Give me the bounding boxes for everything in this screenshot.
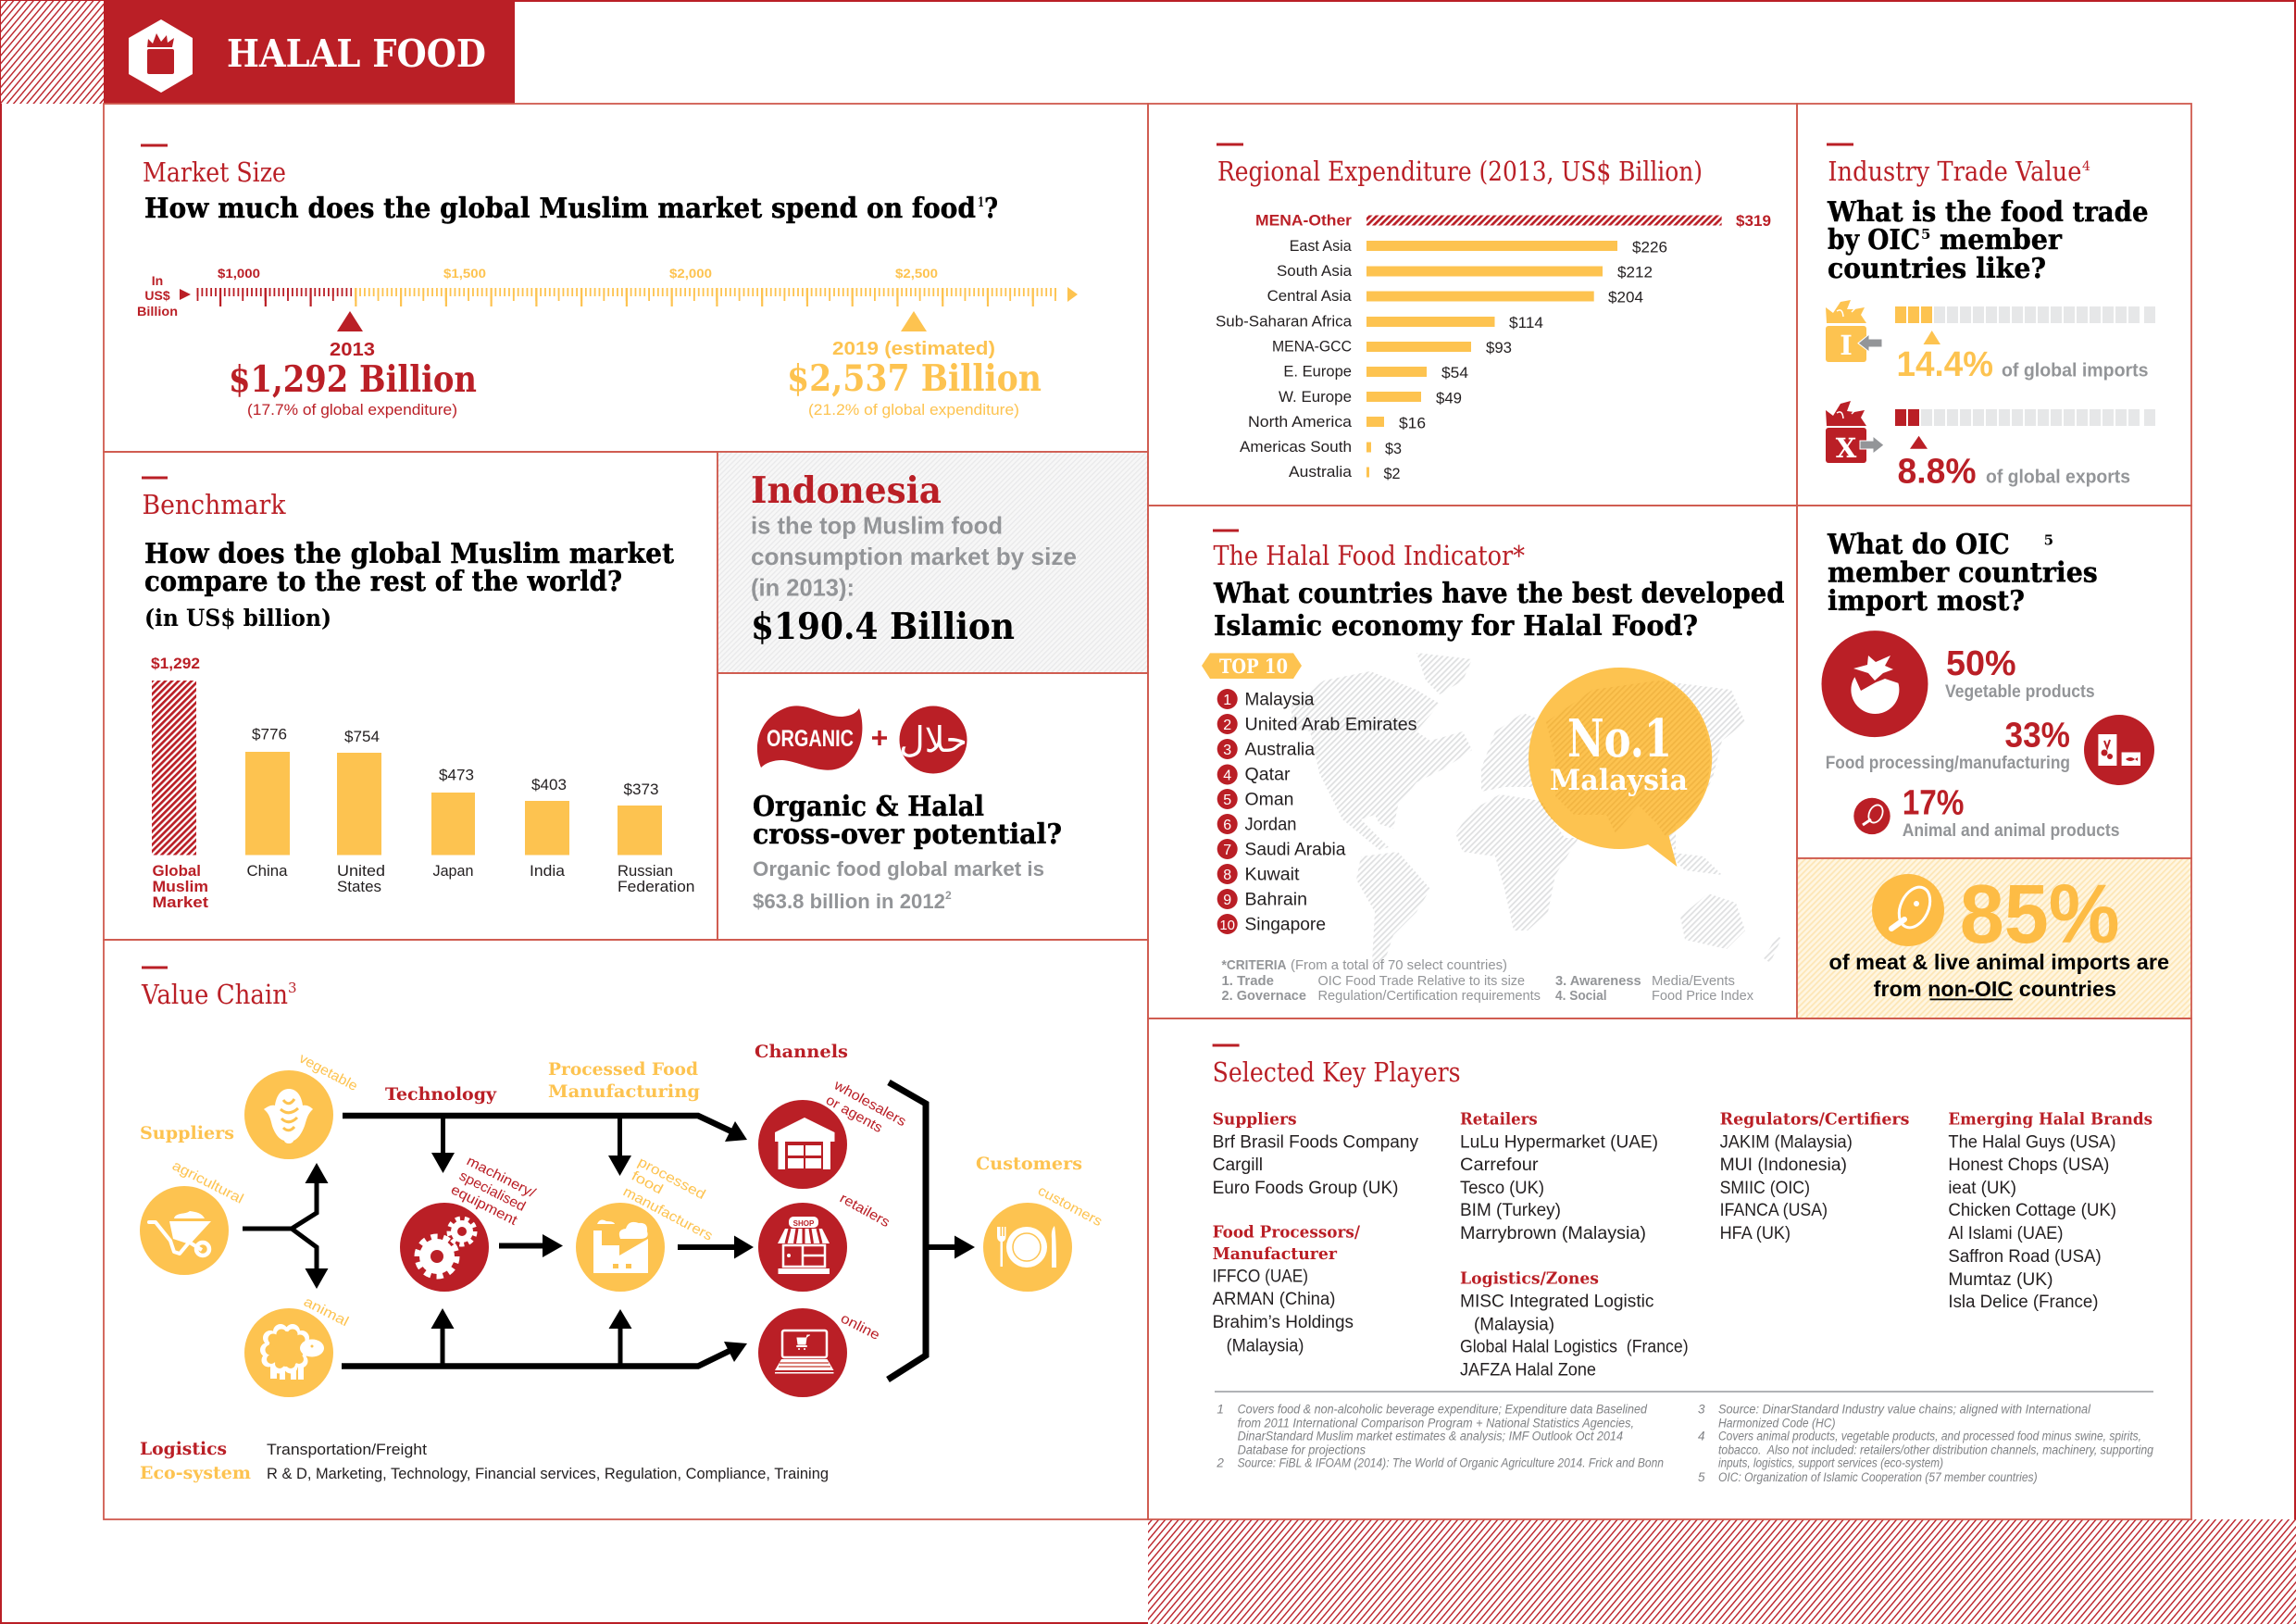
bar chart: regional expenditure: E. Europe <box>1283 363 1352 380</box>
stat: 50% vegetable products: Vegetable products <box>1945 682 2095 702</box>
icon: factory <box>576 1203 665 1292</box>
stat: 50% vegetable products <box>1945 644 2095 702</box>
list: top 10 countries: 4 <box>1223 768 1231 783</box>
footnotes: left column: Database for projections <box>1238 1443 1366 1457</box>
stat: 2019 estimated: 2019 (estimated) <box>832 339 995 359</box>
icon: organic leaf <box>757 706 862 770</box>
arrow: factory to shop <box>678 1235 754 1259</box>
bar chart: regional expenditure: $319 <box>1736 212 1771 230</box>
labels: rotated chain captions: equipment <box>448 1181 520 1229</box>
list: retailers and logistics: Global Halal Logistics (France) <box>1460 1338 1689 1357</box>
callout text: (in 2013): <box>751 574 855 602</box>
footnotes: left column: DinarStandard Muslim market estimates & analysis; IMF Outlook Oct 2014 <box>1238 1430 1623 1443</box>
footnotes: left column: Source: FiBL & IFOAM (2014): The World of Organic Agriculture 2014. Frick and Bonn <box>1238 1456 1664 1470</box>
bar chart: regional expenditure: MENA-Other <box>1255 211 1352 230</box>
list: emerging halal brands <box>1948 1109 2152 1312</box>
bar chart: regional expenditure: $226 <box>1632 239 1667 256</box>
list: suppliers and food processors <box>1213 1109 1418 1356</box>
text: organic market: $63.8 billion in 2012 <box>753 890 945 913</box>
stat: 8.8% of global exports <box>1898 453 2130 492</box>
icon: plus <box>872 731 887 745</box>
footnotes: right column: inputs, logistics, support services (eco-system) <box>1718 1456 1943 1470</box>
stat: 50% vegetable products: 50% <box>1946 644 2016 683</box>
icon: sheep animal <box>244 1308 333 1397</box>
list: suppliers and food processors: Suppliers <box>1213 1109 1297 1129</box>
footnotes: right column: Harmonized Code (HC) <box>1718 1417 1835 1430</box>
list: top 10 countries: Oman <box>1244 791 1294 809</box>
bar chart: market comparison: China <box>246 862 288 880</box>
stat: 2019 estimated: (21.2% of global expenditure) <box>808 401 1019 418</box>
bar chart: regional expenditure: Australia <box>1289 463 1353 481</box>
icon: shop retailers <box>758 1203 847 1292</box>
bar chart: market comparison: Global <box>152 862 201 880</box>
question: organic and halal: Organic & Halal <box>753 791 984 823</box>
callout text: is the top Muslim food <box>751 511 1003 539</box>
icon: plate customers <box>983 1203 1072 1292</box>
stage label: technology: Technology <box>385 1084 497 1105</box>
labels: rotated chain captions: machinery/ <box>464 1153 539 1202</box>
stat: 17% animal products: 17% <box>1903 784 1965 823</box>
heading: selected key players: Selected Key Players <box>1213 1056 1461 1088</box>
icon: small meat <box>1853 798 1890 834</box>
heading: value chain: Value Chain <box>141 979 288 1010</box>
labels: rotated chain captions: specialised <box>456 1168 528 1215</box>
list: top 10 countries: 8 <box>1223 868 1231 883</box>
heading: industry trade value: 4 <box>2082 159 2090 174</box>
labels: rotated chain captions: retailers <box>837 1191 892 1230</box>
chart: import share squares <box>1895 306 2155 344</box>
icon: organic leaf: ORGANIC <box>767 726 854 752</box>
stat: 2013 <box>229 340 477 418</box>
icon: tomato <box>1822 631 1928 737</box>
chart: export share squares <box>1895 409 2155 449</box>
chart: spending ruler: In <box>152 273 163 288</box>
stat: 33% food processing <box>1826 716 2070 773</box>
chart: spending ruler: $2,500 <box>895 266 938 281</box>
labels: rotated chain captions <box>169 1051 1104 1343</box>
footnotes: right column: Source: DinarStandard Industry value chains; aligned with International <box>1718 1403 2091 1417</box>
question: market spend: ? <box>984 193 998 225</box>
list: emerging halal brands: Saffron Road (USA) <box>1948 1247 2102 1267</box>
stat: 2013: $1,292 Billion <box>229 358 477 401</box>
icon: corn vegetable <box>244 1070 333 1159</box>
list: regulators and certifiers: IFANCA (USA) <box>1720 1201 1828 1220</box>
arrow: technology to factory <box>499 1234 563 1257</box>
footnotes: right column: tobacco. Also not included: retailers/other distribution channels, machinery, supporting <box>1718 1443 2153 1457</box>
bar chart: regional expenditure <box>1216 211 1771 482</box>
text: organic market <box>753 857 1044 913</box>
list: suppliers and food processors: Cargill <box>1213 1156 1263 1175</box>
bar chart: market comparison: $754 <box>344 728 380 745</box>
hatched corner top left <box>1 1 104 104</box>
list: suppliers and food processors: Food Processors/ <box>1213 1223 1360 1243</box>
bar chart: regional expenditure: Americas South <box>1240 438 1352 456</box>
bar chart: regional expenditure: $49 <box>1436 389 1462 407</box>
arrow: up to technology <box>431 1308 454 1366</box>
chart: spending ruler: Billion <box>137 304 178 319</box>
question: food trade: 5 <box>1921 226 1930 243</box>
footnotes: right column <box>1698 1403 2153 1484</box>
question: best developed: What countries have the best developed <box>1213 578 1785 610</box>
footnotes: left column: Covers food & non-alcoholic beverage expenditure; Expenditure data Baselined <box>1238 1403 1647 1417</box>
bar chart: market comparison: $473 <box>439 767 474 784</box>
list: top 10 countries: Jordan <box>1244 815 1296 835</box>
callout: number one Malaysia bubble: Malaysia <box>1550 764 1688 797</box>
text: criteria: 2. Governace <box>1222 988 1306 1004</box>
list: retailers and logistics: LuLu Hypermarket (UAE) <box>1460 1132 1658 1152</box>
labels: rotated chain captions: online <box>838 1310 882 1343</box>
text: meat imports: of meat & live animal imports are <box>1829 950 2169 974</box>
question: market spend: 1 <box>978 195 984 210</box>
list: top 10 countries: 10 <box>1219 918 1235 933</box>
legend: logistics: Transportation/Freight <box>267 1441 427 1458</box>
text: criteria: Regulation/Certification requirements <box>1318 988 1541 1004</box>
stat: 2019 estimated <box>787 339 1042 418</box>
bar chart: regional expenditure: $3 <box>1385 440 1402 457</box>
list: retailers and logistics: BIM (Turkey) <box>1460 1201 1561 1220</box>
arrow: up to factory <box>609 1309 631 1366</box>
stage label: processed food manufacturing: Manufacturing <box>548 1081 700 1102</box>
text: criteria: OIC Food Trade Relative to its size <box>1318 973 1525 989</box>
text: criteria: 1. Trade <box>1222 973 1274 989</box>
legend: eco-system <box>140 1463 829 1483</box>
heading: halal food indicator: The Halal Food Indicator* <box>1213 540 1525 571</box>
list: emerging halal brands: Isla Delice (France) <box>1948 1293 2098 1312</box>
panel: halal food indicator <box>1148 506 1797 1018</box>
question: imports: import most? <box>1828 585 2025 618</box>
stage label: customers: Customers <box>976 1154 1082 1174</box>
question: imports <box>1827 529 2098 618</box>
list: suppliers and food processors: (Malaysia) <box>1227 1337 1304 1356</box>
list: top 10 countries: 6 <box>1223 818 1231 833</box>
bar chart: market comparison: Market <box>152 893 208 911</box>
footnotes: left column: 2 <box>1216 1456 1224 1470</box>
stat: 2019 estimated: $2,537 Billion <box>787 357 1042 400</box>
icon: halal circle <box>899 706 967 774</box>
icon: import bag: I <box>1840 330 1853 361</box>
list: top 10 countries: Singapore <box>1244 915 1326 935</box>
labels: rotated chain captions: processed <box>635 1155 708 1203</box>
list: retailers and logistics: Carrefour <box>1460 1156 1539 1175</box>
bar chart: market comparison: Muslim <box>152 878 208 895</box>
list: emerging halal brands: Emerging Halal Brands <box>1948 1109 2152 1129</box>
bar chart: market comparison: Russian <box>618 862 673 880</box>
text: meat imports: from non-OIC countries <box>1874 977 2116 1001</box>
legend: eco-system: Eco-system <box>140 1463 251 1483</box>
list: top 10 countries: Malaysia <box>1244 691 1315 709</box>
panel: market size <box>104 104 1148 452</box>
list: suppliers and food processors: ARMAN (China) <box>1213 1290 1335 1309</box>
bar chart: regional expenditure: South Asia <box>1277 262 1353 280</box>
list: regulators and certifiers: MUI (Indonesia) <box>1720 1156 1847 1175</box>
question: best developed <box>1213 578 1785 643</box>
bar chart: regional expenditure: Sub-Saharan Africa <box>1216 313 1353 330</box>
list: suppliers and food processors: Brf Brasil Foods Company <box>1213 1132 1418 1152</box>
list: emerging halal brands: Chicken Cottage (UK) <box>1948 1201 2116 1220</box>
icon: export bag: X <box>1836 432 1857 464</box>
stat: 14.4% of global imports: of global imports <box>2002 361 2148 381</box>
list: top 10 countries <box>1217 689 1416 935</box>
list: retailers and logistics: Marrybrown (Malaysia) <box>1460 1224 1646 1243</box>
footnotes: right column: OIC: Organization of Islamic Cooperation (57 member countries) <box>1718 1470 2038 1484</box>
arrow: channels bracket to customers <box>888 1082 975 1380</box>
panel: organic and halal <box>718 673 1148 940</box>
footnotes: right column: Covers animal products, vegetable products, and processed food minus swine, spirits, <box>1718 1430 2141 1443</box>
bar chart: regional expenditure: $114 <box>1509 314 1543 331</box>
question: benchmark <box>144 538 674 631</box>
list: top 10 countries: Qatar <box>1244 765 1291 785</box>
bar chart: market comparison: Japan <box>433 862 474 880</box>
heading: value chain: 3 <box>288 980 297 996</box>
list: emerging halal brands: The Halal Guys (USA) <box>1948 1132 2116 1152</box>
question: imports: 5 <box>2044 532 2053 549</box>
list: top 10 countries: 5 <box>1223 793 1231 808</box>
stat: 8.8% of global exports: 8.8% <box>1898 453 1976 492</box>
stat: 85%: 85% <box>1960 868 2120 961</box>
list: top 10 countries: United Arab Emirates <box>1244 715 1416 735</box>
list: top 10 countries: 1 <box>1223 693 1231 708</box>
list: suppliers and food processors: IFFCO (UAE) <box>1213 1268 1308 1287</box>
list: top 10 countries: Kuwait <box>1244 865 1300 885</box>
bar chart: regional expenditure: Central Asia <box>1267 287 1352 305</box>
question: best developed: Islamic economy for Halal Food? <box>1214 610 1698 643</box>
stage label: processed food manufacturing <box>548 1059 700 1102</box>
icon: packaged food <box>2084 715 2154 785</box>
bar chart: regional expenditure: $54 <box>1441 364 1468 381</box>
list: regulators and certifiers: JAKIM (Malaysia) <box>1720 1132 1853 1152</box>
icon: gears technology <box>400 1203 489 1292</box>
bar chart: regional expenditure: $93 <box>1486 339 1512 356</box>
callout: number one Malaysia bubble: No.1 <box>1567 708 1672 769</box>
list: emerging halal brands: Al Islami (UAE) <box>1948 1224 2063 1243</box>
panel: Indonesia callout <box>718 452 1148 673</box>
icon: import bag <box>1826 300 1882 362</box>
stat: 8.8% of global exports: of global exports <box>1986 468 2130 488</box>
question: benchmark: compare to the rest of the world? <box>144 566 622 598</box>
list: retailers and logistics: JAFZA Halal Zone <box>1460 1361 1596 1380</box>
stat: 17% animal products <box>1903 784 2120 841</box>
list: regulators and certifiers: SMIIC (OIC) <box>1720 1179 1810 1198</box>
stat: 14.4% of global imports <box>1896 345 2148 384</box>
list: top 10 countries: 3 <box>1223 743 1231 758</box>
text: criteria: (From a total of 70 select countries) <box>1291 957 1507 973</box>
list: regulators and certifiers: HFA (UK) <box>1720 1224 1791 1243</box>
chart: spending ruler: $2,000 <box>669 266 712 281</box>
list: suppliers and food processors: Euro Foods Group (UK) <box>1213 1179 1398 1198</box>
chart: spending ruler: $1,500 <box>443 266 486 281</box>
list: emerging halal brands: ieat (UK) <box>1948 1179 2016 1198</box>
panel: selected key players <box>1148 1018 2191 1519</box>
question: food trade: What is the food trade <box>1827 196 2148 229</box>
stat: 17% animal products: Animal and animal products <box>1903 821 2120 841</box>
labels: rotated chain captions: animal <box>301 1293 351 1330</box>
bar chart: market comparison: Federation <box>618 878 694 895</box>
question: imports: member countries <box>1828 557 2098 590</box>
bar chart: market comparison: $776 <box>252 726 287 743</box>
labels: rotated chain captions: agricultural <box>169 1157 246 1207</box>
footnotes: left column: from 2011 International Comparison Program + National Statistics Agencies, <box>1238 1417 1634 1430</box>
text: meat imports <box>1829 950 2169 1001</box>
bar chart: regional expenditure: $212 <box>1617 264 1653 281</box>
panel: industry trade value <box>1797 104 2191 506</box>
legend: logistics <box>140 1439 427 1459</box>
list: emerging halal brands: Mumtaz (UK) <box>1948 1270 2053 1290</box>
icon: hexagon shopping bag <box>129 19 193 93</box>
text: criteria: *CRITERIA <box>1222 957 1287 973</box>
question: benchmark: (in US$ billion) <box>144 605 331 631</box>
question: market spend: How much does the global Muslim market spend on food <box>144 193 976 225</box>
list: top 10 countries: Saudi Arabia <box>1244 841 1346 859</box>
list: retailers and logistics <box>1460 1109 1689 1380</box>
list: regulators and certifiers: Regulators/Certifiers <box>1720 1109 1909 1129</box>
bar chart: regional expenditure: $16 <box>1399 415 1426 431</box>
question: organic and halal: cross-over potential? <box>753 818 1062 851</box>
bar chart: market comparison: $1,292 <box>151 655 200 672</box>
question: organic and halal <box>753 791 1062 851</box>
hatched band bottom right <box>1148 1519 2296 1624</box>
legend: logistics: Logistics <box>140 1439 227 1459</box>
heading: benchmark: Benchmark <box>143 489 286 520</box>
heading: market size: Market Size <box>143 156 286 188</box>
labels: rotated chain captions: manufacturers <box>620 1184 716 1244</box>
list: top 10 countries: 9 <box>1223 893 1231 908</box>
bar chart: regional expenditure: East Asia <box>1290 237 1352 255</box>
heading: industry trade value: Industry Trade Value <box>1828 156 2081 187</box>
text: criteria <box>1222 957 1753 1004</box>
labels: rotated chain captions: customers <box>1035 1183 1104 1230</box>
stat: 33% food processing: 33% <box>2005 716 2070 755</box>
chart: spending ruler <box>137 266 1078 331</box>
map: world map hatched <box>1292 653 1781 963</box>
list: retailers and logistics: (Malaysia) <box>1474 1316 1554 1335</box>
question: food trade: countries like? <box>1828 253 2046 285</box>
bar chart: regional expenditure: W. Europe <box>1279 388 1352 406</box>
arrow: vegetable to wholesalers <box>343 1116 747 1142</box>
text: criteria: Food Price Index <box>1652 988 1753 1004</box>
arrow: down to technology <box>431 1116 455 1173</box>
list: regulators and certifiers <box>1720 1109 1909 1243</box>
bar chart: market comparison: United <box>337 862 385 880</box>
stage label: processed food manufacturing: Processed Food <box>548 1059 698 1080</box>
panel: OIC imports <box>1797 506 2191 858</box>
footnotes: right column: 5 <box>1698 1470 1705 1484</box>
icon: laptop online <box>758 1308 847 1397</box>
bar chart: regional expenditure: North America <box>1248 413 1353 431</box>
list: retailers and logistics: Logistics/Zones <box>1460 1269 1599 1289</box>
labels: rotated chain captions: wholesalers <box>830 1077 909 1130</box>
text: organic market: Organic food global market is <box>753 857 1044 881</box>
callout text <box>751 511 1077 602</box>
callout: number one Malaysia bubble <box>1529 668 1713 867</box>
bar chart: market comparison: States <box>337 878 381 895</box>
chart: spending ruler: US$ <box>144 288 170 303</box>
header banner <box>104 0 515 104</box>
stat: 14.4% of global imports: 14.4% <box>1896 345 1993 384</box>
list: retailers and logistics: MISC Integrated Logistic <box>1460 1293 1653 1312</box>
bar chart: market comparison: $373 <box>624 781 659 798</box>
footnotes: left column: 1 <box>1217 1403 1224 1417</box>
badge: top 10: TOP 10 <box>1219 655 1288 678</box>
panel: regional expenditure <box>1148 104 1797 506</box>
list: top 10 countries: Australia <box>1244 741 1315 759</box>
stat: 2013: 2013 <box>330 340 375 360</box>
bar chart: market comparison: India <box>530 862 566 880</box>
stage label: channels: Channels <box>755 1042 848 1062</box>
panel: 85 percent callout <box>1797 858 2191 1018</box>
labels: rotated chain captions: food <box>629 1168 666 1197</box>
heading: regional expenditure: Regional Expenditure (2013, US$ Billion) <box>1217 156 1703 187</box>
list: retailers and logistics: Tesco (UK) <box>1460 1179 1544 1198</box>
arrow: agricultural fork <box>243 1163 328 1289</box>
bar chart: regional expenditure: $2 <box>1383 465 1400 482</box>
stat: 2013: (17.7% of global expenditure) <box>247 401 457 418</box>
list: suppliers and food processors: Manufacturer <box>1213 1244 1337 1264</box>
labels: rotated chain captions: or agents <box>823 1093 885 1136</box>
footnotes: left column <box>1216 1403 1664 1470</box>
bar chart: market comparison: $403 <box>531 776 567 793</box>
question: imports: What do OIC <box>1827 529 2010 561</box>
callout text: consumption market by size <box>751 543 1077 570</box>
stage label: suppliers: Suppliers <box>140 1123 234 1143</box>
question: benchmark: How does the global Muslim market <box>144 538 674 570</box>
question: food trade: by OIC <box>1828 224 1920 256</box>
icon: large meat <box>1872 874 1944 946</box>
title: HALAL FOOD <box>227 31 486 76</box>
question: food trade: member <box>1940 224 2063 256</box>
list: top 10 countries: 7 <box>1223 843 1231 858</box>
text: criteria: 4. Social <box>1555 988 1607 1004</box>
list: suppliers and food processors: Brahim’s Holdings <box>1213 1313 1354 1332</box>
stat: 33% food processing: Food processing/manufacturing <box>1826 754 2070 773</box>
chart: spending ruler: $1,000 <box>218 266 260 281</box>
list: retailers and logistics: Retailers <box>1460 1109 1538 1129</box>
icon: export bag <box>1826 401 1884 464</box>
callout value: $190.4 Billion <box>751 606 1015 648</box>
list: top 10 countries: 2 <box>1223 718 1231 733</box>
text: criteria: Media/Events <box>1652 973 1735 989</box>
panel: benchmark <box>104 452 718 940</box>
bar chart: regional expenditure: $204 <box>1608 289 1643 306</box>
list: emerging halal brands: Honest Chops (USA) <box>1948 1156 2109 1175</box>
icon: warehouse wholesalers <box>758 1100 847 1189</box>
bar chart: market comparison <box>151 655 694 911</box>
icon: shop retailers: SHOP <box>793 1219 815 1228</box>
icon: halal circle: حلال <box>899 719 967 760</box>
arrow: animal to online <box>342 1342 747 1367</box>
text: organic market: 2 <box>945 889 952 902</box>
arrow: down to factory <box>608 1116 631 1176</box>
icon: wheelbarrow agricultural <box>140 1186 229 1275</box>
footnotes: right column: 3 <box>1698 1403 1705 1417</box>
text: criteria: 3. Awareness <box>1555 973 1641 989</box>
bar chart: regional expenditure: MENA-GCC <box>1272 337 1352 356</box>
footnotes: right column: 4 <box>1698 1430 1705 1443</box>
labels: rotated chain captions: vegetable <box>296 1051 360 1094</box>
list: top 10 countries: Bahrain <box>1244 891 1307 909</box>
panel: value chain <box>104 940 1148 1519</box>
question: food trade <box>1827 196 2148 285</box>
callout heading: Indonesia: Indonesia <box>751 469 942 512</box>
legend: eco-system: R & D, Marketing, Technology, Financial services, Regulation, Compliance, Training <box>267 1465 829 1482</box>
